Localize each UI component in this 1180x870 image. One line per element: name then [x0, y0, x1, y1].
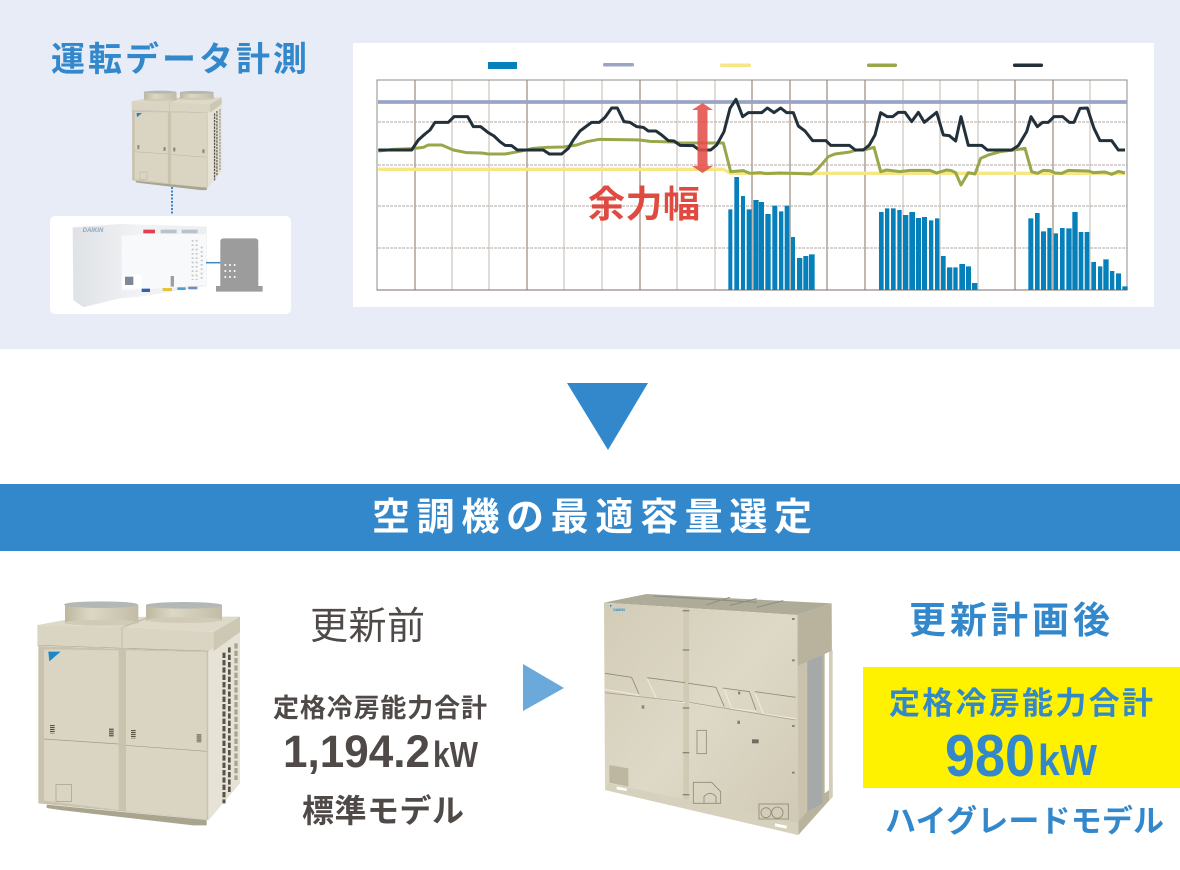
- arrow: margin width: [692, 103, 713, 173]
- line: yellow series: [378, 169, 1125, 173]
- heading: operation data measurement: 運転データ計測: [51, 40, 307, 79]
- value: 1,194.2kW: 1,194.2: [283, 726, 430, 777]
- callout: yellow capacity box: kW: [1038, 736, 1097, 785]
- icon: data controller: DAIKIN: [83, 228, 104, 234]
- chart grid: [377, 80, 1127, 290]
- line: capacity limit: [378, 100, 1127, 104]
- label: standard model: 標準モデル: [302, 793, 464, 829]
- line: olive series: [378, 139, 1125, 185]
- callout: yellow capacity box: [863, 667, 1180, 789]
- banner: optimal capacity selection: 空調機の最適容量選定: [372, 497, 812, 539]
- panel: after renewal text: [863, 600, 1180, 839]
- icon: grey terminal: [216, 238, 263, 292]
- illustration: existing outdoor unit: [37, 601, 240, 825]
- label: rated cooling capacity total: 定格冷房能力合計: [273, 693, 487, 723]
- panel: controller device box: [50, 216, 291, 314]
- panel: before renewal text: [273, 606, 487, 829]
- line: black series: [378, 99, 1125, 154]
- label: high grade model: ハイグレードモデル: [885, 804, 1164, 839]
- bar series: [728, 177, 1128, 290]
- callout: yellow capacity box: 980: [945, 723, 1035, 789]
- value: 1,194.2kW: kW: [433, 734, 478, 775]
- connector: blue cable: [206, 262, 221, 264]
- label: margin width: 余力幅: [588, 184, 700, 225]
- illustration: new outdoor unit: DAIKIN: [613, 608, 625, 612]
- panel: measurement background: [0, 0, 1180, 349]
- connector: dotted line: [171, 187, 173, 214]
- label: after renewal plan: 更新計画後: [909, 600, 1110, 641]
- icon: data controller: [73, 224, 207, 307]
- banner: optimal capacity selection: [0, 484, 1180, 551]
- illustration: new outdoor unit: [604, 594, 833, 835]
- icon: small outdoor unit: [132, 91, 222, 190]
- panel: chart: [353, 43, 1154, 307]
- callout: yellow capacity box: 定格冷房能力合計: [889, 686, 1153, 721]
- arrow: right triangle: [523, 664, 564, 711]
- chart legend: [488, 62, 1043, 69]
- arrow: down triangle: [567, 383, 648, 450]
- label: before renewal: 更新前: [310, 606, 425, 648]
